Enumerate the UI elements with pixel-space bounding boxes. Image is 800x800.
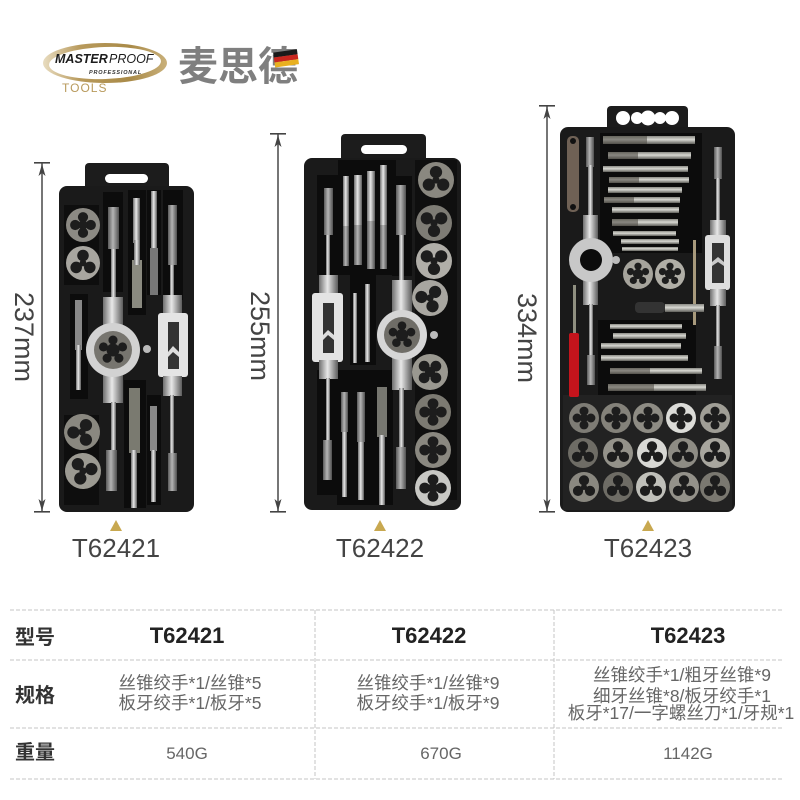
dimension arrow: 237mm: 237mm (9, 292, 39, 382)
tap thread shading (603, 136, 654, 391)
specs T62422: 板牙绞手*1/板牙*9 (357, 693, 499, 713)
specs T62423: 板牙*17/一字螺丝刀*1/牙规*1 (568, 703, 794, 723)
dimension arrow: 334mm: 334mm (512, 293, 542, 383)
tap wrench (705, 147, 730, 379)
model T62423: T62423 (651, 623, 725, 648)
model T62421: T62421 (150, 623, 224, 648)
model label: T62422: T62422 (336, 533, 424, 563)
specs T62422: 丝锥绞手*1/丝锥*9 (357, 673, 499, 693)
round dies grid (568, 403, 730, 502)
round dies (405, 162, 455, 506)
logo: Master Proof Tools: TOOLS (62, 81, 107, 95)
row header: weight: 重量 (15, 741, 55, 764)
product tray: T62422 (304, 134, 461, 510)
dimension arrow: 334mm (512, 105, 555, 513)
model T62422: T62422 (392, 623, 466, 648)
lower taps (601, 324, 706, 391)
model label: T62423 (604, 520, 692, 563)
logo: Master Proof Tools: MASTER (55, 52, 108, 66)
upper taps (603, 136, 695, 251)
weight T62421: 540G (166, 744, 208, 763)
dimension arrow: 255mm: 255mm (245, 291, 275, 381)
weight T62423: 1142G (663, 744, 713, 763)
model label: T62422 (336, 520, 424, 563)
die wrench (377, 185, 438, 489)
flat gauge (567, 136, 579, 212)
row header: model: 型号 (15, 626, 55, 649)
round dies (57, 208, 107, 494)
row header: specification: 规格 (15, 684, 55, 707)
dimension arrow: 255mm (245, 133, 286, 513)
tap wrench (312, 188, 343, 480)
brand name with German flag: 麦思德 (178, 45, 298, 89)
taps (75, 191, 158, 508)
specs T62421: 板牙绞手*1/板牙*5 (119, 693, 261, 713)
specs T62421: 丝锥绞手*1/丝锥*5 (119, 673, 261, 693)
product tray: T62421 (57, 163, 194, 512)
handle holes (616, 110, 679, 126)
specs T62423: 丝锥绞手*1/粗牙丝锥*9 (593, 665, 771, 685)
red screwdriver (569, 285, 579, 397)
tap wrench (158, 205, 188, 491)
dimension arrow: 237mm (9, 162, 50, 513)
model label: T62423: T62423 (604, 533, 692, 563)
T-handle chuck (635, 240, 704, 325)
product tray: T62423 (560, 106, 735, 512)
model label: T62421 (72, 520, 160, 563)
hex dies (623, 259, 685, 289)
model label: T62421: T62421 (72, 533, 160, 563)
taps (341, 165, 387, 505)
die wrench (569, 137, 620, 385)
die wrench (86, 207, 151, 491)
specs T62423: 细牙丝锥*8/板牙绞手*1 (593, 686, 771, 706)
logo: Master Proof Tools: PROFESSIONAL (89, 70, 142, 76)
logo: Master Proof Tools (43, 43, 167, 95)
logo: Master Proof Tools: PROOF (109, 52, 155, 66)
weight T62422: 670G (420, 744, 462, 763)
specification table (10, 610, 794, 779)
